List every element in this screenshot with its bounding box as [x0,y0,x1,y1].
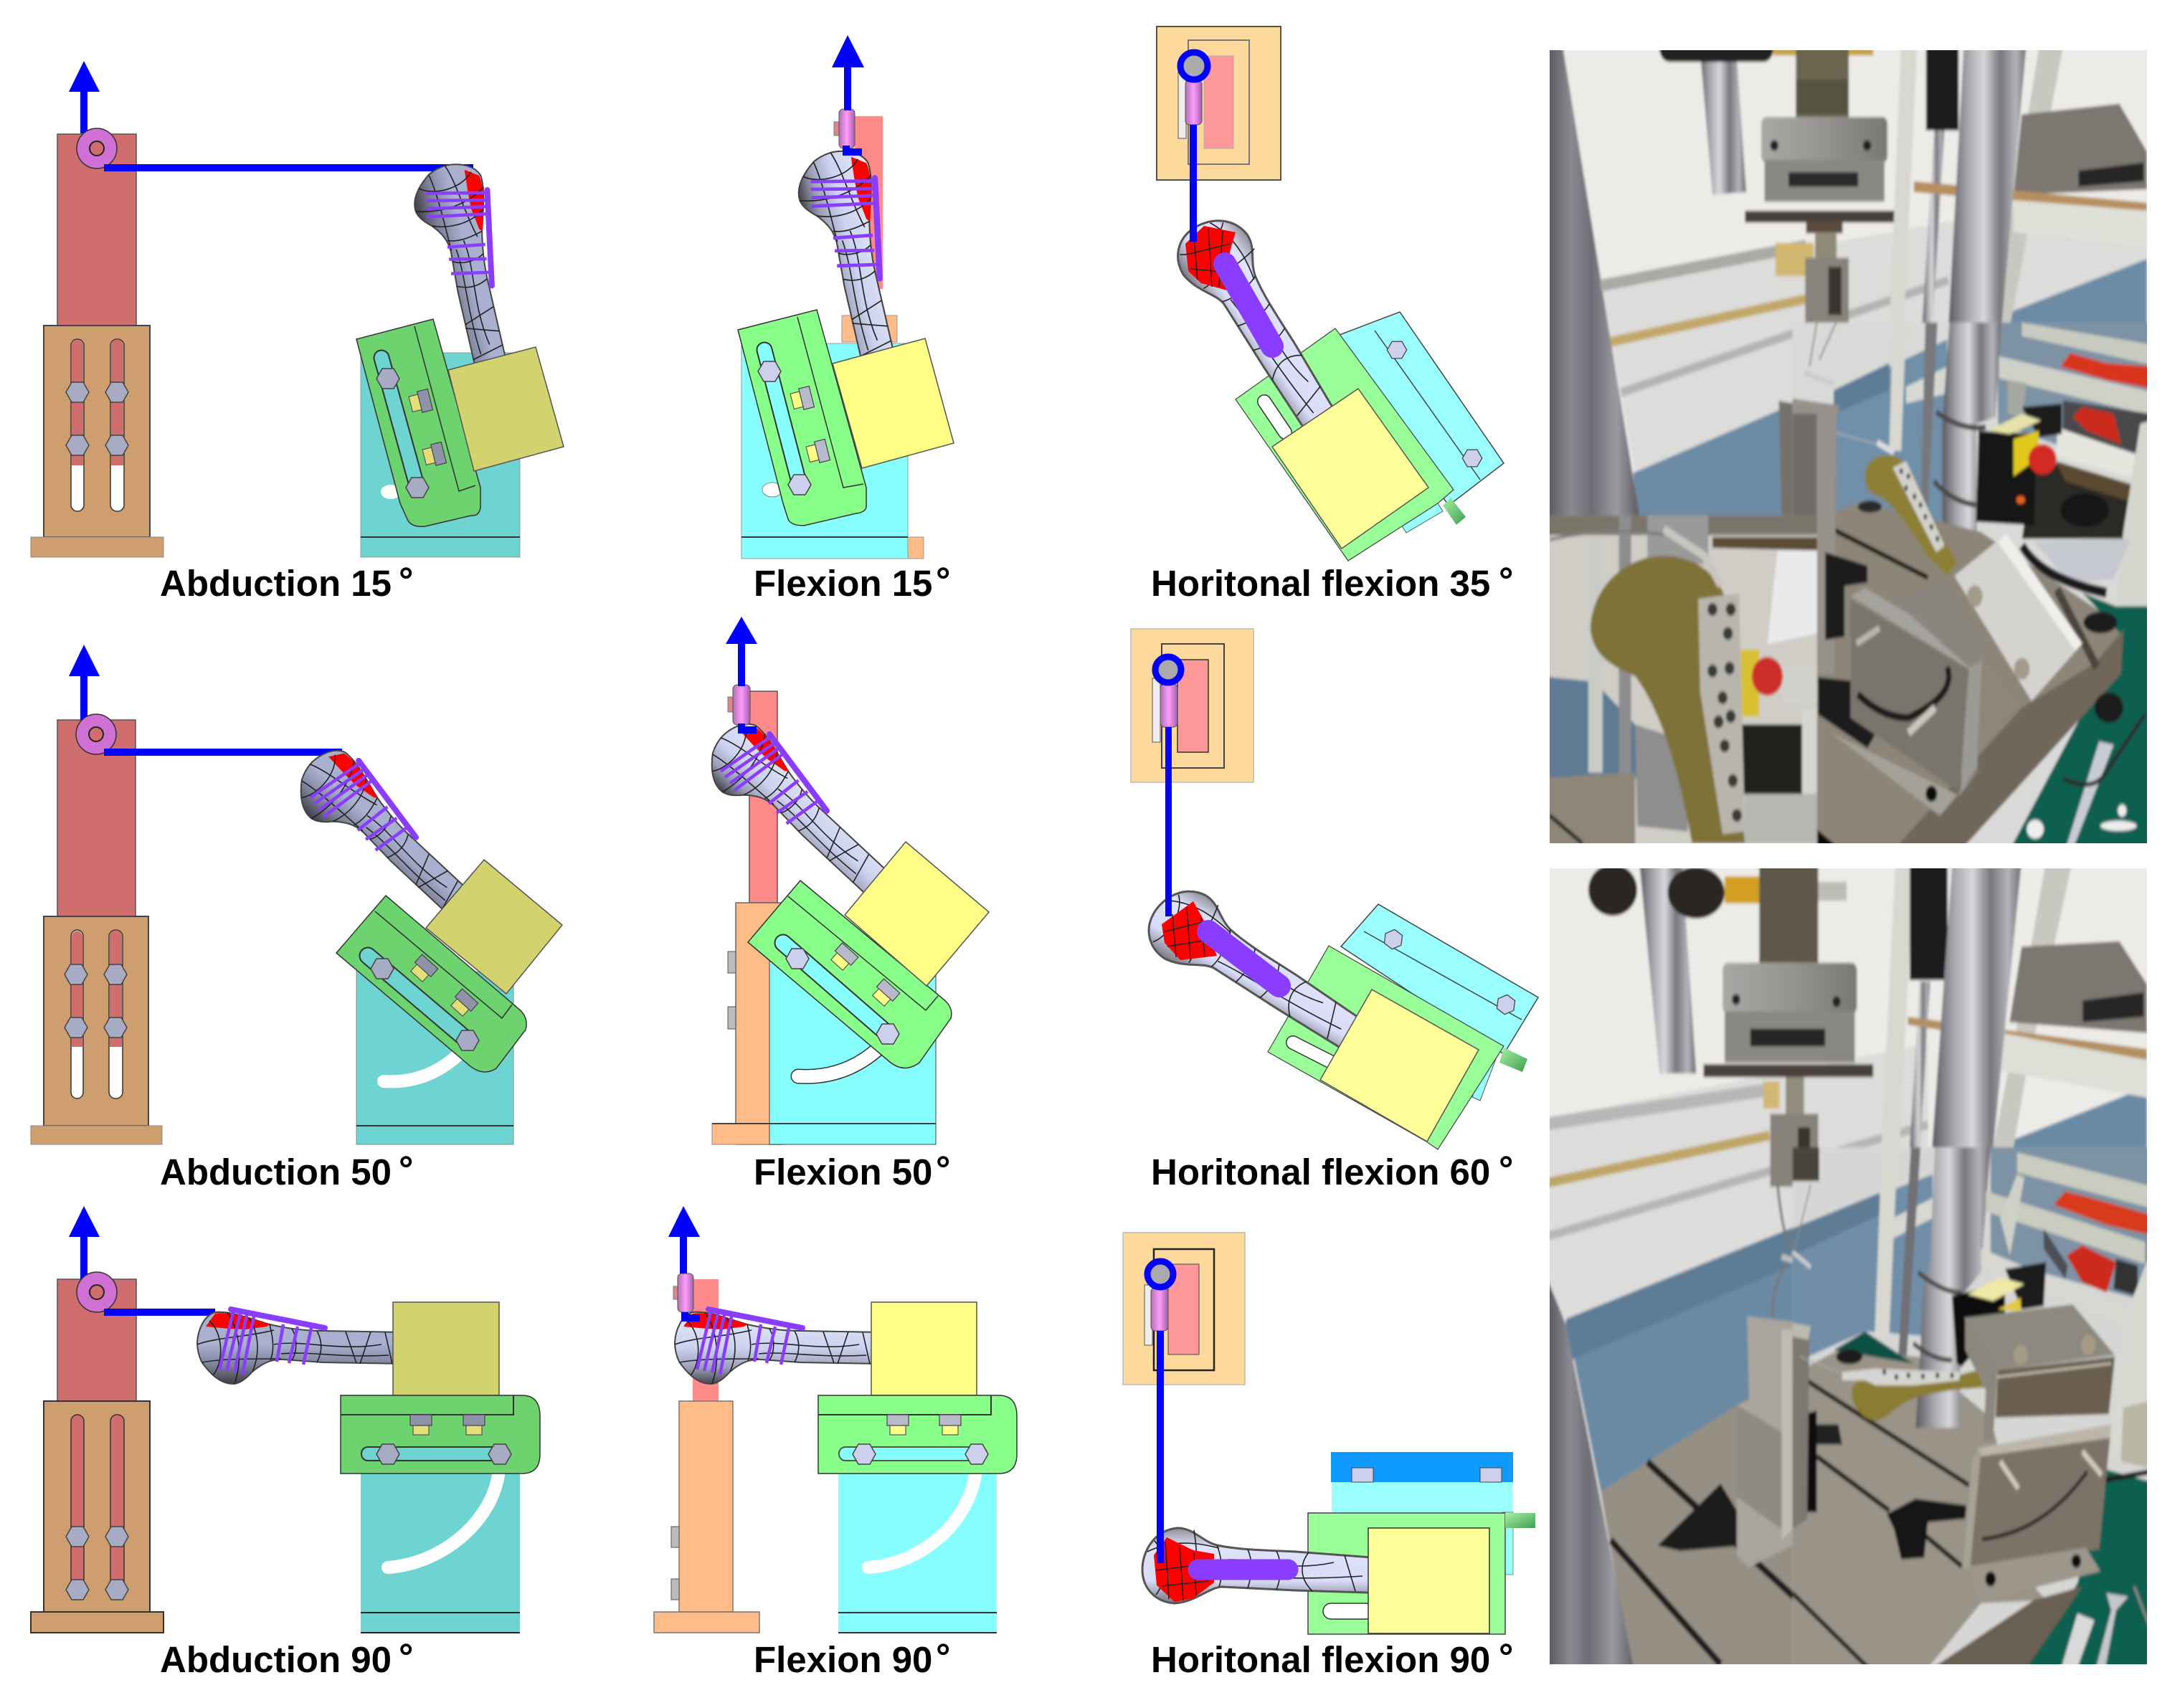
load arrow [668,1206,700,1273]
yellow block [1368,1528,1489,1633]
load arrow [832,35,864,110]
photo: test setup with inset of bone and plate [1550,50,2147,843]
cyan plate [1334,312,1504,533]
cyan block [356,961,513,1144]
panel: Abduction 90 [31,1206,540,1680]
cable [1157,1331,1164,1563]
slotted base [31,326,164,557]
link [1151,1288,1168,1331]
short cable [741,723,757,730]
green plate [356,319,480,526]
purple plate [1208,931,1279,986]
caption: Horitonal flexion 35 [1151,563,1490,604]
humerus [197,1309,446,1384]
humerus [284,738,518,960]
link [834,109,855,148]
green plate [1308,1513,1535,1634]
washer [76,714,116,754]
caption: ° [936,560,950,601]
column [693,1279,719,1401]
cable [104,749,342,756]
yellow block [426,860,562,994]
blue ring [1180,52,1208,80]
cyan block [741,343,908,559]
green plate [748,881,952,1068]
orange support [654,1401,759,1633]
cyan block [838,1474,997,1633]
orange support [712,903,782,1144]
short cable [846,146,862,152]
red contact region [1185,226,1236,291]
link [673,1273,693,1312]
load arrow [69,1206,100,1279]
green plate [818,1395,1017,1474]
panel: Horizontal flexion 35 [1151,27,1513,604]
yellow block [845,842,989,986]
humerus [675,1309,924,1384]
panel: Abduction 15 [31,61,564,604]
load arrow [726,617,757,686]
panel: Flexion 90 [654,1206,1017,1680]
panel: Flexion 15 [738,35,954,604]
photo: test setup at 90 degrees [1550,868,2147,1664]
panel: Flexion 50 [695,617,989,1192]
short cable [685,1312,700,1318]
cyan block [712,961,936,1144]
washer [77,128,117,169]
caption: ° [936,1149,950,1190]
yellow block [1320,990,1479,1142]
caption: Flexion 90 [754,1639,932,1680]
load arrow [69,645,100,720]
caption: ° [936,1636,950,1677]
fixture column [57,134,136,326]
humerus [790,143,929,416]
green plate [341,1395,540,1474]
panel: Horizontal flexion 60 [1131,629,1538,1192]
slotted base [31,916,162,1144]
yellow block [833,338,954,468]
column [749,691,777,903]
humerus [1137,878,1390,1067]
humerus with plate [407,157,539,417]
caption: ° [399,1149,413,1190]
caption: ° [1499,1636,1513,1677]
blue ring [1147,1261,1173,1287]
caption: ° [1499,560,1513,601]
cyan block [361,353,520,557]
cable [104,1309,215,1316]
green plate [738,310,866,526]
column [57,1279,136,1401]
cyan block [361,1474,520,1633]
blue ring [1155,657,1181,683]
caption: ° [399,1636,413,1677]
load arrow [69,61,100,133]
caption: Flexion 15 [754,563,932,604]
humerus [695,711,929,934]
cyan block with blue top [1331,1452,1513,1575]
red contact region [1162,901,1217,960]
green plate [1236,328,1466,561]
caption: Abduction 50 [160,1152,392,1192]
lower right of photo [1793,1147,2151,1674]
slotted base [31,1401,164,1633]
link [728,685,750,725]
red contact region [1154,1537,1214,1602]
caption: Abduction 15 [160,563,392,604]
panel: Horizontal flexion 90 [1123,1233,1535,1680]
caption: Horitonal flexion 60 [1151,1152,1490,1192]
orange block [842,315,924,559]
caption: Horitonal flexion 90 [1151,1639,1490,1680]
lower right of photo [1793,323,2151,850]
yellow block [1272,389,1428,549]
cable [1165,727,1172,916]
link [1185,80,1202,125]
link [1160,684,1177,727]
caption: ° [399,560,413,601]
cyan plate [1341,904,1538,1101]
column [855,116,883,289]
washer [77,1272,117,1312]
purple plate [1225,264,1272,346]
cable [1190,125,1197,242]
purple plate [1198,1559,1288,1580]
yellow block [871,1302,977,1395]
top view frame [1157,27,1281,180]
yellow block [393,1302,499,1395]
top view frame [1123,1233,1245,1385]
humerus [1142,1528,1391,1603]
humerus [1165,205,1369,452]
green plate [1268,946,1527,1149]
cable [104,164,473,171]
panel: Abduction 50 [31,645,562,1192]
yellow block [448,347,564,471]
green plate [336,896,526,1072]
caption: Flexion 50 [754,1152,932,1192]
caption: Abduction 90 [160,1639,392,1680]
caption: ° [1499,1149,1513,1190]
column [57,720,136,916]
top view frame [1131,629,1254,782]
